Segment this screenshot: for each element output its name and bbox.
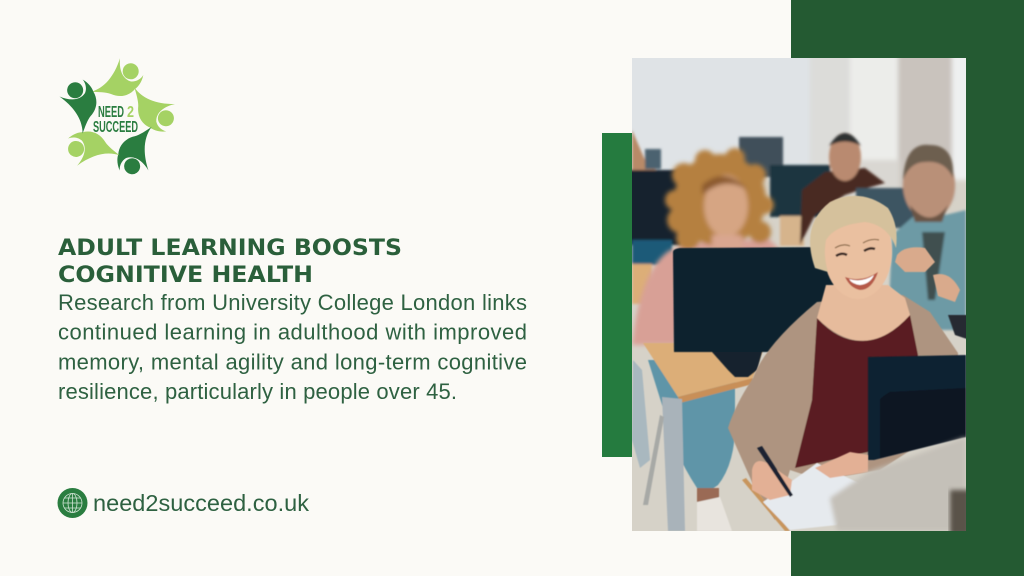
logo text: NEED bbox=[98, 104, 124, 121]
figure lower left bbox=[58, 122, 122, 182]
icon: globe bbox=[58, 488, 88, 518]
floor, jeans and desk bbox=[632, 343, 765, 531]
body text bbox=[58, 290, 527, 404]
smiling woman in foreground bbox=[728, 196, 970, 520]
blurred background people and monitors bbox=[625, 130, 966, 330]
paper, pen and hands bbox=[742, 446, 868, 531]
photo: adult learners in a computer classroom bbox=[625, 50, 972, 535]
background wall and windows bbox=[632, 58, 966, 195]
front monitor bbox=[673, 247, 838, 377]
body text: memory, mental agility and long-term cognitive bbox=[58, 349, 527, 374]
logo text: 2 bbox=[127, 104, 134, 121]
heading: ADULT LEARNING BOOSTS bbox=[58, 236, 402, 261]
green accent bar bbox=[602, 133, 632, 457]
figure bottom bbox=[107, 123, 171, 184]
heading bbox=[58, 236, 402, 288]
body text: resilience, particularly in people over 45. bbox=[58, 379, 457, 404]
figure upper left bbox=[51, 74, 103, 135]
body text: Research from University College London links bbox=[58, 290, 527, 315]
heading: COGNITIVE HEALTH bbox=[58, 263, 313, 288]
figure right bbox=[130, 77, 182, 138]
blurred chair in foreground bbox=[830, 437, 966, 531]
figure top bbox=[92, 58, 143, 96]
logo: Need 2 Succeed bbox=[51, 58, 182, 184]
curly haired woman bbox=[632, 148, 790, 345]
dark green side panel bbox=[791, 0, 1024, 576]
foreground monitor bbox=[868, 355, 966, 460]
website address: need2succeed.co.uk bbox=[93, 490, 309, 516]
logo text bbox=[93, 104, 138, 136]
logo text: SUCCEED bbox=[93, 119, 138, 136]
body text: continued learning in adulthood with improved bbox=[58, 320, 527, 345]
